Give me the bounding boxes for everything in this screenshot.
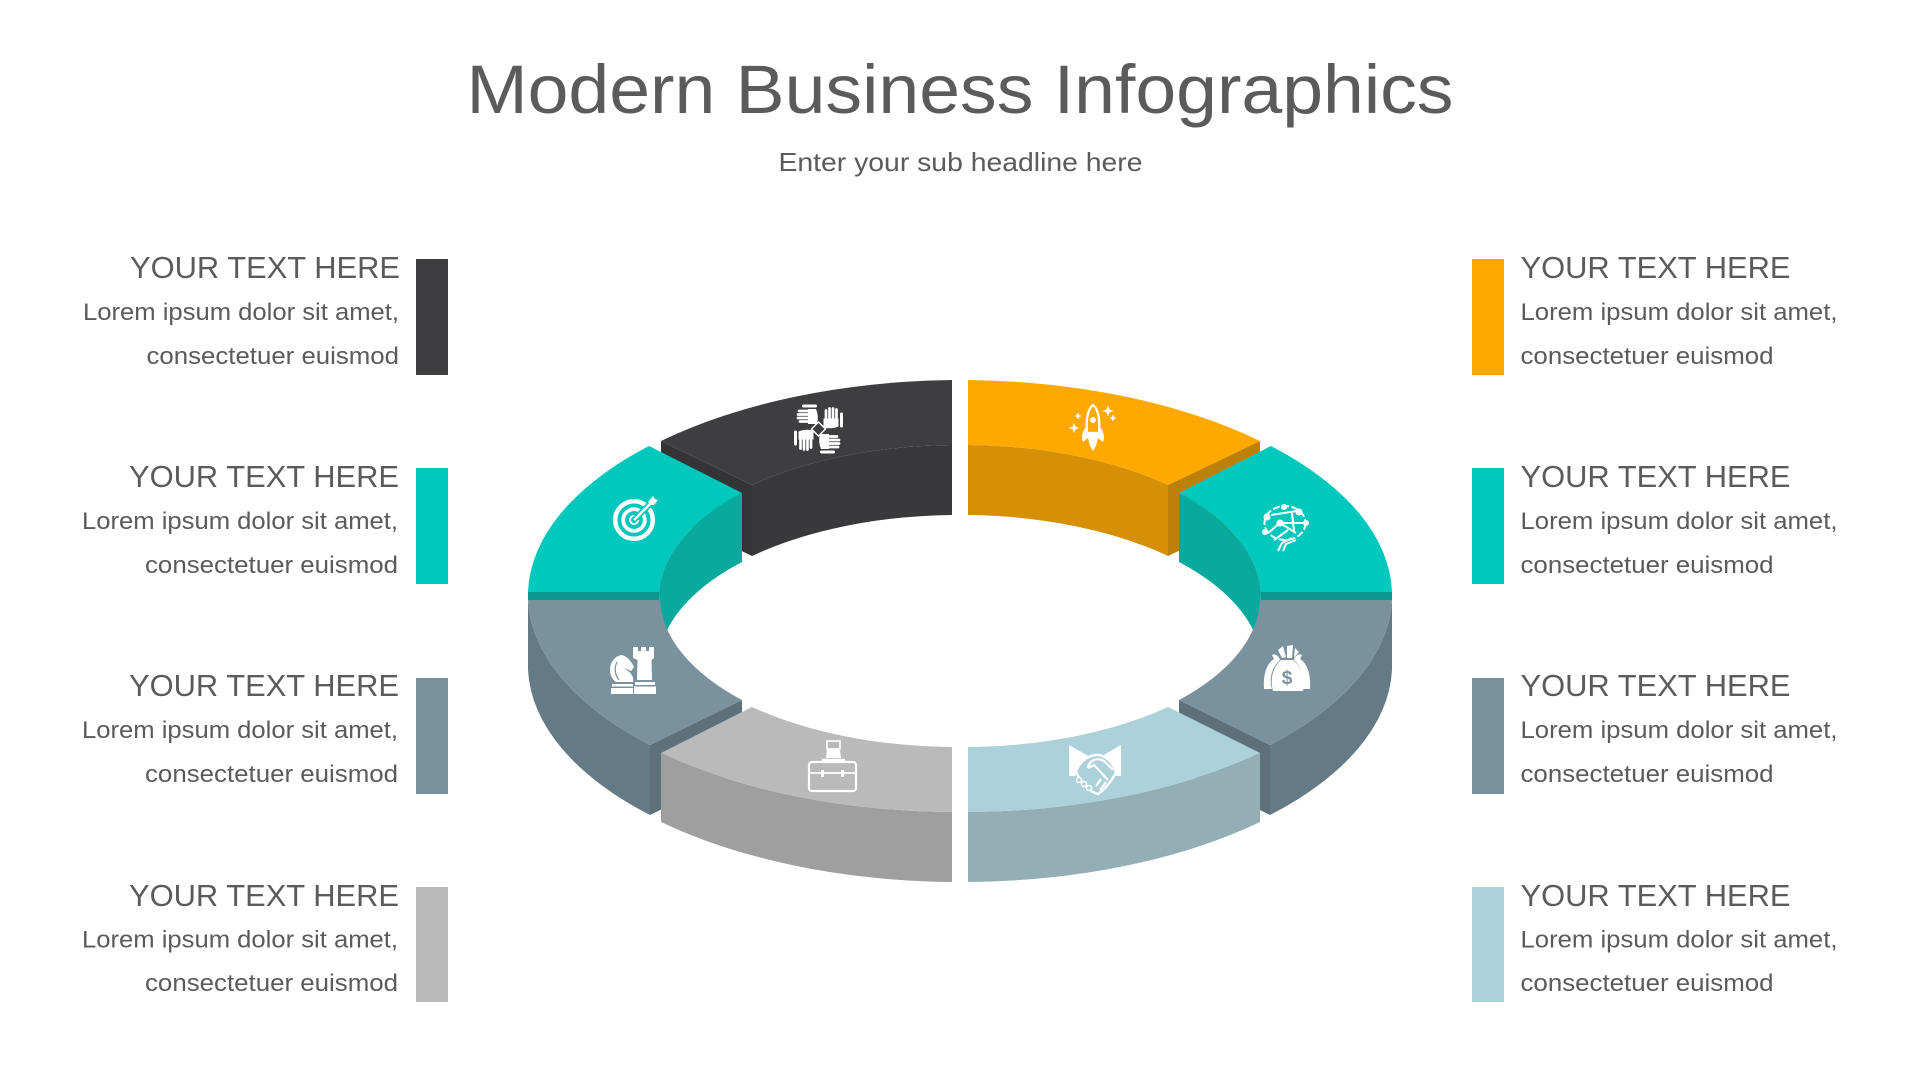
- heading: YOUR TEXT HERE: [1520, 459, 1790, 494]
- body line 2: consectetuer euismod: [145, 970, 398, 997]
- body line 1: Lorem ipsum dolor sit amet,: [83, 299, 399, 326]
- heading: YOUR TEXT HERE: [1520, 250, 1790, 285]
- panel: left item 3: [82, 668, 448, 794]
- body line 2: consectetuer euismod: [145, 552, 398, 579]
- panel: left item 2: [82, 459, 448, 584]
- segment: teal right: [1179, 446, 1392, 650]
- subtitle: Enter your sub headline here: [778, 147, 1142, 177]
- segment: slate left: [528, 600, 742, 815]
- body line 1: Lorem ipsum dolor sit amet,: [1520, 508, 1838, 535]
- panel: right item 4: [1472, 878, 1838, 1002]
- segment: dark top left: [661, 380, 952, 556]
- color bar slate: [1472, 678, 1504, 794]
- body line 1: Lorem ipsum dolor sit amet,: [1520, 299, 1838, 326]
- icon: rocket: [1070, 405, 1116, 451]
- body line 2: consectetuer euismod: [145, 761, 398, 788]
- icon: briefcase with hand: [809, 741, 856, 791]
- icon: money bag: [1264, 645, 1310, 691]
- dollar sign: $: [1282, 668, 1293, 689]
- color bar orange: [1472, 259, 1504, 375]
- heading: YOUR TEXT HERE: [130, 250, 400, 285]
- panel: left item 1: [83, 250, 448, 375]
- body line 1: Lorem ipsum dolor sit amet,: [82, 926, 398, 954]
- body line 1: Lorem ipsum dolor sit amet,: [82, 508, 398, 535]
- icon: brain network: [1262, 504, 1309, 551]
- icon: handshake: [1069, 745, 1121, 794]
- segment: slate right: [1179, 600, 1392, 815]
- color bar teal: [416, 468, 448, 584]
- ring chart: [528, 380, 1392, 882]
- heading: YOUR TEXT HERE: [129, 878, 399, 913]
- color bar teal: [1472, 468, 1504, 584]
- color bar dark: [416, 259, 448, 375]
- body line 1: Lorem ipsum dolor sit amet,: [1520, 717, 1838, 744]
- heading: YOUR TEXT HERE: [129, 459, 399, 494]
- panel: right item 2: [1472, 459, 1838, 584]
- heading: YOUR TEXT HERE: [1520, 668, 1790, 703]
- body line 2: consectetuer euismod: [1520, 761, 1774, 788]
- segment: orange top right: [968, 380, 1260, 556]
- segment: gray bottom left: [661, 707, 952, 882]
- panel: left item 4: [82, 878, 448, 1002]
- panel: right item 3: [1472, 668, 1838, 794]
- body line 2: consectetuer euismod: [146, 343, 399, 370]
- heading: YOUR TEXT HERE: [1520, 878, 1790, 913]
- heading: YOUR TEXT HERE: [129, 668, 399, 703]
- color bar light blue: [1472, 887, 1504, 1002]
- icon: target: [615, 496, 658, 539]
- body line 2: consectetuer euismod: [1520, 552, 1774, 579]
- body line 1: Lorem ipsum dolor sit amet,: [1520, 926, 1838, 954]
- color bar gray: [416, 887, 448, 1002]
- icon: four hands: [794, 404, 843, 454]
- body line 1: Lorem ipsum dolor sit amet,: [82, 717, 398, 744]
- segment: light blue bottom right: [968, 707, 1260, 882]
- body line 2: consectetuer euismod: [1520, 970, 1774, 997]
- title: Modern Business Infographics: [466, 51, 1454, 128]
- color bar slate: [416, 678, 448, 794]
- body line 2: consectetuer euismod: [1520, 343, 1774, 370]
- segment: teal left: [528, 446, 742, 650]
- icon: chess knight and rook: [610, 647, 656, 694]
- panel: right item 1: [1472, 250, 1838, 375]
